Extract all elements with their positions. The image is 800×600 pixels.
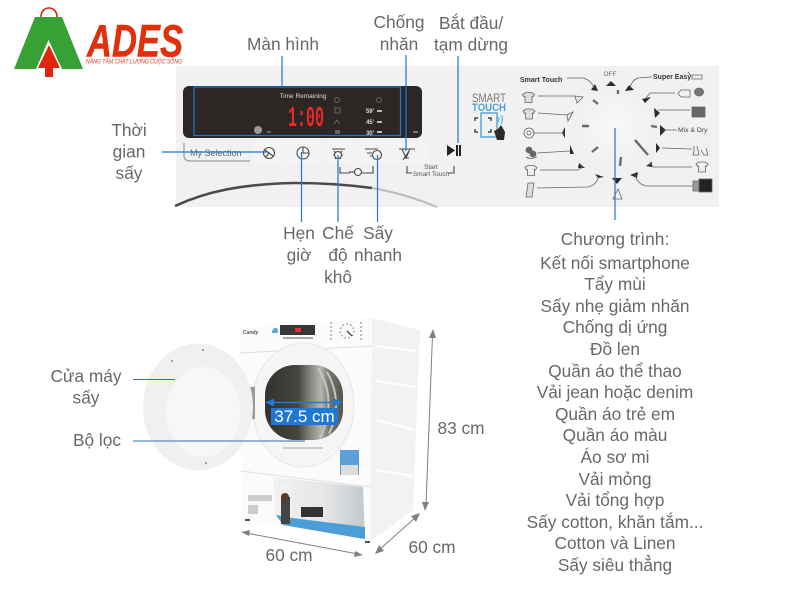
promo sticker (273, 477, 365, 538)
dimension arrows (241, 329, 436, 557)
dryer feet (245, 519, 250, 521)
label: Chế độ khô: Chế (322, 223, 354, 243)
energy label (340, 450, 359, 475)
program list: Vải mỏng (578, 469, 652, 489)
program list: Sấy cotton, khăn tắm... (527, 512, 703, 532)
program list: Quần áo thể thao (548, 361, 682, 381)
start smart touch label (407, 164, 454, 178)
dial program labels: Smart Touch (520, 77, 562, 84)
label: Sấy nhanh: Sấy (363, 223, 393, 243)
label: Cửa máy sấy: sấy (73, 388, 100, 408)
promo dark display (301, 507, 323, 517)
dryer notes (248, 495, 272, 514)
label: Thời gian sấy: gian (113, 142, 145, 162)
dial program icons and leader lines (522, 72, 712, 199)
smart touch logo: TOUCH (472, 102, 506, 114)
label: Chế độ khô: khô (324, 267, 352, 287)
dial program labels: Mix & Dry (678, 127, 708, 134)
start smart touch label: Smart Touch (413, 171, 450, 178)
program list: Kết nối smartphone (540, 253, 690, 273)
program dial (562, 81, 666, 184)
program list: Sấy siêu thẳng (558, 555, 672, 575)
open door (143, 344, 253, 470)
diameter arrow (265, 398, 343, 406)
callout lines: dryer (133, 380, 305, 441)
callout lines: control panel (162, 55, 615, 222)
label: 60 cm depth: 60 cm (408, 537, 456, 557)
smart touch logo: SMART (472, 91, 507, 105)
program list: Sấy nhẹ giảm nhăn (541, 296, 689, 316)
display screen (183, 86, 422, 138)
display screen: Time Remaining (279, 93, 327, 100)
dryer front (240, 318, 372, 542)
button icons (264, 145, 461, 160)
label: Bắt đầu/tạm dừng: tạm dừng (434, 34, 508, 54)
program list: Cotton và Linen (554, 533, 676, 553)
display screen: 59' (366, 109, 375, 115)
logo: ADES (14, 8, 183, 77)
label: Chế độ khô: độ (328, 245, 348, 265)
display screen: 30' (366, 131, 375, 137)
label: Chống nhăn: nhăn (380, 34, 418, 54)
program list: Vải jean hoặc denim (537, 382, 693, 402)
dial program labels (520, 71, 708, 134)
drum opening (265, 365, 343, 440)
label: Hẹn giờ: giờ (287, 245, 311, 265)
label: Bộ lọc: Bộ lọc (73, 430, 121, 450)
label: Hẹn giờ: Hẹn (283, 223, 315, 243)
dial program labels: Super Easy (653, 74, 691, 81)
curved door edge (175, 183, 437, 207)
label: Màn hình: Màn hình (247, 34, 319, 54)
logo wordmark: ADES (86, 16, 183, 66)
button pads (252, 143, 427, 163)
my selection label (184, 143, 250, 161)
display screen: 45' (366, 120, 375, 126)
door hinge (247, 387, 255, 419)
label: Thời gian sấy: sấy (116, 163, 143, 183)
dial program labels: OFF (604, 71, 617, 78)
dial indicator marks (582, 90, 657, 166)
program list: Vải tổng hợp (566, 490, 664, 510)
program list: Áo sơ mi (581, 447, 649, 467)
panel: control panel photo (175, 66, 719, 207)
label: 83 cm: 83 cm (437, 418, 485, 438)
start smart touch label: Start (424, 164, 438, 171)
dryer control strip (243, 322, 361, 341)
smart touch logo (472, 91, 507, 140)
key lock icon (340, 166, 373, 176)
program list: Tẩy mùi (584, 274, 646, 294)
label: Sấy nhanh: nhanh (354, 245, 402, 265)
logo tagline: NÂNG TẦM CHẤT LƯỢNG CUỘC SỐNG (86, 56, 182, 66)
door gasket (252, 343, 354, 467)
program list: Chương trình: (561, 229, 669, 249)
dryer side panel (370, 318, 420, 542)
label: 60 cm width: 60 cm (265, 545, 313, 565)
diameter label: 37.5 cm (274, 407, 335, 426)
label: Chống nhăn: Chống (374, 12, 424, 32)
dryer control strip: Candy (243, 330, 258, 336)
promo woman (281, 497, 290, 524)
icon: green shopping bag (14, 8, 83, 77)
dial markers (562, 81, 666, 184)
filter slot caption (283, 447, 323, 449)
label: Cửa máy sấy: Cửa máy (50, 366, 122, 386)
my selection label: My Selection (190, 148, 242, 158)
program list: Đồ len (590, 339, 640, 359)
program list: Quần áo màu (563, 425, 667, 445)
display screen: 1:00 (288, 102, 324, 135)
program list: Quần áo trẻ em (555, 404, 675, 424)
label: Bắt đầu/tạm dừng: Bắt đầu/ (439, 13, 503, 33)
label: Thời gian sấy: Thời (111, 120, 147, 140)
program list: Chống dị ứng (563, 317, 667, 337)
dryer photo (143, 318, 420, 543)
